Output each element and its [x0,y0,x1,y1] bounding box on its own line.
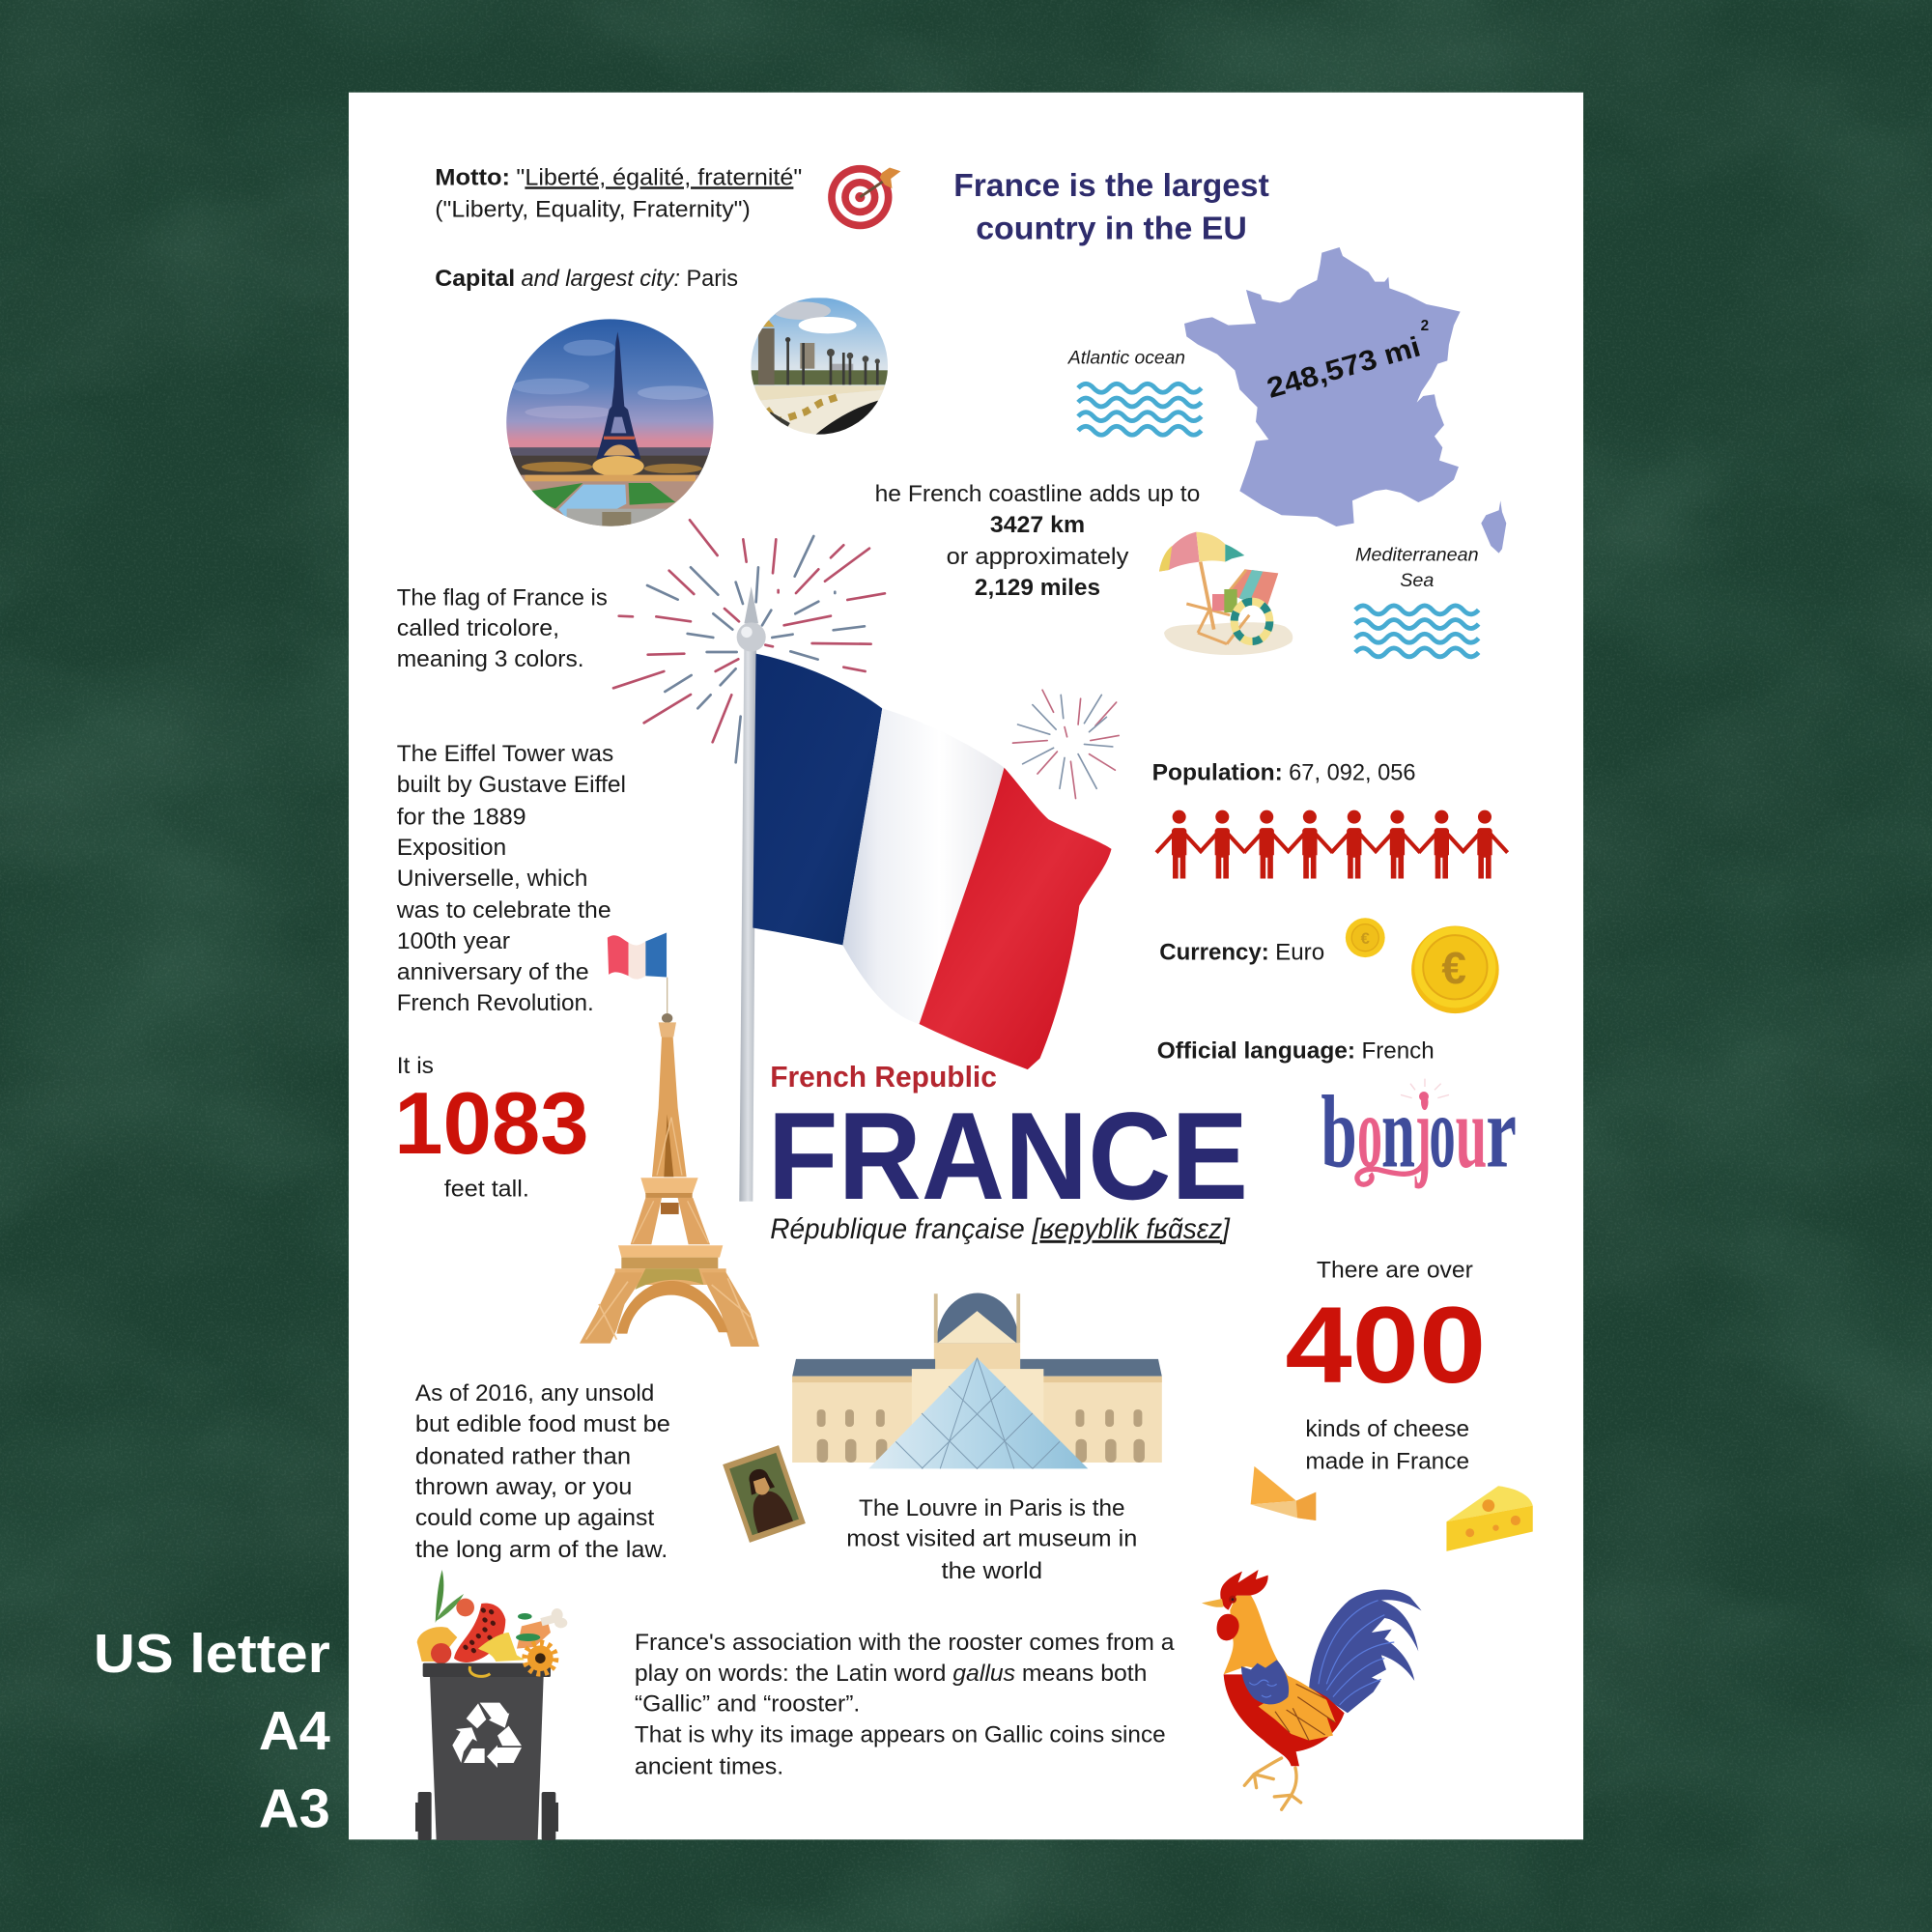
title: FRANCE: FRANCE [768,1087,1248,1226]
label: Atlantic ocean: Atlantic ocean [1067,347,1185,368]
subtitle: native name and pronunciation: République française [ʁepyblik fʁɑ̃sɛz] [770,1213,1231,1245]
fireworks: small [1012,690,1119,799]
text: rooster explanation: play on words: the Latin word gallus means both [635,1661,1148,1687]
text: food waste law: the long arm of the law. [415,1537,668,1563]
map of France: 248,573 mi [1264,331,1424,405]
text: rooster explanation: France's association with the rooster comes from a [635,1630,1175,1656]
icon: bonjour lettering: r [1486,1075,1517,1189]
icon: bonjour lettering: j [1415,1075,1432,1189]
text: motto: Motto: [435,164,510,190]
text: tricolore: meaning 3 colors. [397,646,584,672]
text: Eiffel Tower history: The Eiffel Tower was [397,741,613,767]
text: coastline [875,481,1200,601]
text: population [1152,759,1416,785]
flag of France on pole [737,586,1112,1202]
text: Eiffel Tower history: Universelle, which [397,866,587,892]
text: motto [435,164,802,222]
icon: Mediterranean waves [1355,606,1479,657]
white poster sheet [349,93,1583,1839]
icon: beach umbrella and chair [1159,532,1293,655]
label: Mediterranean Sea: Mediterranean [1355,544,1479,565]
icon: target with arrow [828,165,900,229]
text: rooster explanation: “Gallic” and “rooster”. [635,1691,860,1718]
text: capital: and largest city: [522,266,680,292]
text: coastline: he French coastline adds up to [875,481,1200,507]
text: Eiffel Tower history: was to celebrate the [396,897,611,923]
text: Eiffel Tower history: built by Gustave Eiffel [397,772,626,798]
text: coastline: 2,129 miles [975,575,1100,601]
text: rooster explanation: That is why its image appears on Gallic coins since [635,1722,1166,1748]
stat: 400 kinds of cheese [1285,1258,1486,1474]
icon: large euro coin [1411,926,1499,1013]
icon: yellow cheese wedge [1446,1486,1533,1551]
icon: bonjour lettering: b [1321,1075,1357,1189]
label: paper sizes: A3 [259,1778,330,1839]
text: currency: Currency: [1159,940,1269,966]
text: capital: Paris [686,266,738,292]
stat: 1083 feet tall [394,1053,589,1203]
text: Eiffel Tower history: for the 1889 [397,804,526,830]
stat: 400 kinds of cheese: There are over [1317,1258,1473,1284]
icon: bonjour lettering: o [1429,1075,1456,1189]
text: population: 67, 092, 056 [1289,759,1416,785]
text: official language: Official language: [1157,1038,1355,1065]
text: food waste law: As of 2016, any unsold [415,1380,654,1406]
icon: Atlantic waves [1078,384,1202,435]
text: tricolore: The flag of France is [397,584,608,611]
stat: 400 kinds of cheese: made in France [1305,1448,1469,1474]
illustration: rooster [1202,1570,1422,1809]
stat: 1083 feet tall: It is [397,1053,434,1079]
text: food waste law: could come up against [415,1505,655,1531]
text: Louvre caption: most visited art museum in [846,1526,1137,1552]
text: capital: Capital [435,266,515,292]
heading: largest country: country in the EU [976,211,1247,246]
icon: bonjour lettering: o [1357,1075,1382,1189]
label: Mediterranean Sea [1355,544,1479,591]
label: Mediterranean Sea: Sea [1400,570,1434,591]
icon: small euro coin: € [1361,929,1370,948]
text: Eiffel Tower history: French Revolution. [397,990,594,1016]
text: Eiffel Tower history: 100th year [397,928,510,954]
text: currency: Euro [1275,940,1324,966]
map of France: 2 [1421,318,1429,334]
text: official language: French [1361,1038,1435,1065]
icon: large euro coin: € [1441,943,1466,993]
text: Eiffel Tower history: Exposition [397,835,506,861]
icon: bonjour lettering [1321,1075,1517,1189]
text: Eiffel Tower history [396,741,626,1016]
fireworks: large [613,520,885,762]
text: food waste law: thrown away, or you [415,1474,632,1500]
photo: Pont Alexandre III [751,298,889,438]
icon: small flag on tower [608,933,667,980]
text: tricolore: called tricolore, [397,615,559,641]
subtitle: French Republic: French Republic [770,1061,997,1094]
icon: row of people [1156,810,1508,878]
icon: Mona Lisa painting [723,1445,806,1543]
text: Louvre caption: The Louvre in Paris is the [859,1495,1125,1521]
label: paper sizes: US letter [94,1623,330,1684]
label: paper sizes: A4 [259,1700,330,1761]
icon: recycling bin with food [415,1570,567,1840]
heading: largest country [953,168,1269,246]
photo: Eiffel Tower at dusk [505,319,715,529]
text: motto: ("Liberty, Equality, Fraternity") [435,196,751,222]
stat: 1083 feet tall: feet tall. [444,1177,529,1203]
icon: bonjour lettering: n [1381,1075,1415,1189]
text: food waste law: but edible food must be [415,1411,670,1437]
text: Louvre caption: the world [941,1558,1042,1584]
stat: 1083 feet tall: 1083 [394,1075,589,1173]
text: tricolore [397,584,608,672]
text: food waste law [415,1380,670,1563]
text: coastline: 3427 km [990,512,1085,538]
stat: 400 kinds of cheese: kinds of cheese [1305,1416,1469,1442]
text: rooster explanation: ancient times. [635,1754,783,1780]
text: currency [1159,940,1324,966]
text: coastline: or approximately [947,544,1129,570]
stat: 400 kinds of cheese: 400 [1285,1284,1486,1406]
icon: small euro coin [1346,918,1385,957]
text: population: Population: [1152,759,1283,785]
label: paper sizes [94,1623,330,1839]
text: motto: "Liberté, égalité, fraternité " [516,164,802,190]
map of France [1184,247,1506,554]
text: food waste law: donated rather than [415,1443,631,1469]
icon: Eiffel Tower [580,978,759,1347]
illustration: Louvre with pyramid [792,1293,1162,1468]
heading: largest country: France is the largest [953,168,1269,204]
text: capital [435,266,738,292]
icon: orange cheese wedge [1251,1466,1316,1520]
text: Eiffel Tower history: anniversary of the [397,959,589,985]
text: rooster explanation [635,1630,1175,1780]
icon: bonjour lettering: u [1456,1075,1487,1189]
text: Louvre caption [846,1495,1137,1584]
